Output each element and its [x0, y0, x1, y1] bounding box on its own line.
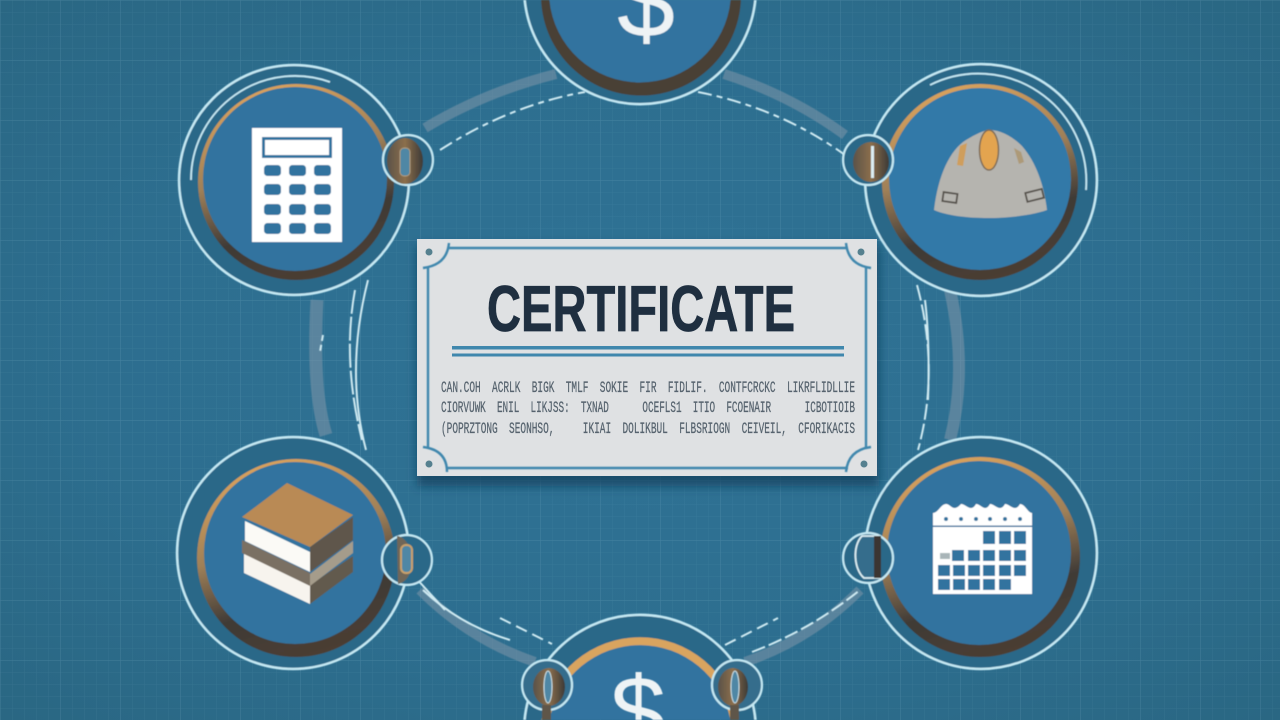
- panel: certificate card: [417, 239, 879, 486]
- icon: calendar: [933, 504, 1032, 594]
- card body text: CAN.COH ACRLK BIGK TMLF SOKIE FIR FIDLIF. CONTFCRCKC LIKRFLIDLLIE: [441, 379, 855, 397]
- panel: calculator medallion: [179, 65, 433, 295]
- panel: bottom medallion: [522, 615, 762, 720]
- connector ring: [383, 135, 433, 185]
- icon: calculator: [252, 128, 342, 242]
- panel: top dollar medallion: [525, 0, 755, 104]
- connector ring: [382, 535, 432, 585]
- panel: books medallion: [177, 437, 432, 669]
- card title: CERTIFICATE: [487, 272, 795, 345]
- card border with corners: [423, 243, 871, 472]
- connector ring: [843, 135, 893, 185]
- connector ring: [843, 533, 893, 583]
- right connector ring: [712, 660, 762, 720]
- left connector ring: [522, 660, 572, 720]
- icon: hard hat: [934, 130, 1047, 218]
- panel: hard hat medallion: [843, 64, 1097, 296]
- title underline: [452, 346, 844, 356]
- panel: calendar medallion: [843, 437, 1097, 669]
- card body text: [441, 379, 855, 438]
- card body text: (POPRZTONG SEONHSO, IKIAI DOLIKBUL FLBSRIOGN CEIVEIL, CFORIKACIS: [441, 420, 855, 438]
- corner rivets: [426, 248, 868, 468]
- card body text: CIORVUWK ENIL LIKJSS: TXNAD OCEFLS1 ITIO FCOENAIR ICBOTIOIB: [441, 399, 855, 417]
- dashed and thin white arcs: [320, 92, 929, 652]
- connecting circular track: [316, 74, 959, 662]
- icon: stacked books: [242, 483, 353, 604]
- gray band arcs: [316, 74, 959, 662]
